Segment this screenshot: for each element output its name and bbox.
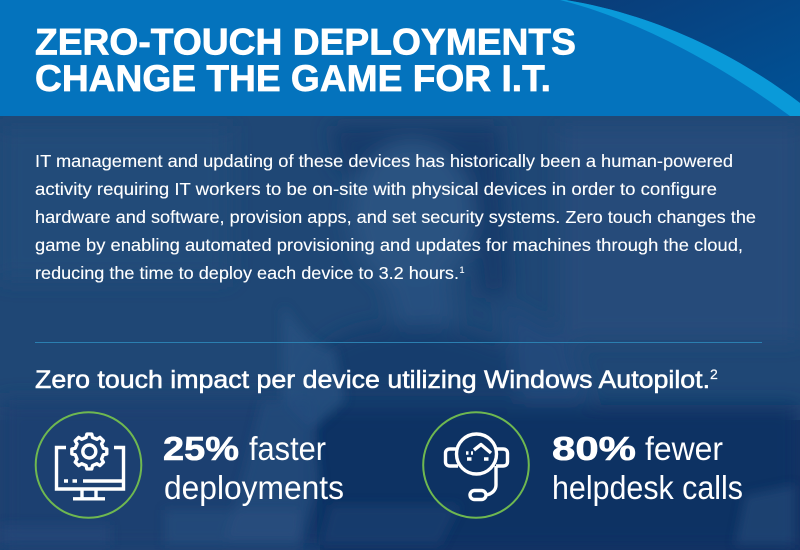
intro paragraph: hardware and software, provision apps, and set security systems. Zero touch changes the bbox=[35, 207, 756, 227]
intro paragraph bbox=[35, 151, 756, 283]
label: 25% bbox=[163, 430, 239, 467]
divider bbox=[35, 342, 762, 343]
title bbox=[35, 22, 576, 99]
corner: light blue arc bbox=[560, 0, 800, 116]
intro paragraph: game by enabling automated provisioning and updates for machines through the cloud, bbox=[35, 235, 743, 255]
icon: headset agent bbox=[423, 412, 529, 518]
stat: 80% fewer helpdesk calls: fewer bbox=[645, 430, 723, 467]
header band with curved corner bbox=[0, 0, 800, 116]
title: CHANGE THE GAME FOR I.T. bbox=[35, 58, 551, 99]
intro paragraph: 1 bbox=[460, 265, 465, 275]
stat: 25% faster deployments: faster bbox=[249, 430, 326, 467]
subheading: Zero touch impact per device utilizing Windows Autopilot. bbox=[35, 366, 710, 394]
stat: 25% faster deployments bbox=[36, 412, 344, 518]
intro paragraph: activity requiring IT workers to be on-site with physical devices in order to configure bbox=[35, 179, 717, 199]
stat: 80% fewer helpdesk calls: helpdesk calls bbox=[552, 469, 743, 506]
subheading: 2 bbox=[710, 366, 718, 382]
stat: 25% faster deployments: deployments bbox=[164, 469, 344, 506]
icon: monitor with gear bbox=[36, 412, 141, 518]
intro paragraph: IT management and updating of these devices has historically been a human-powered bbox=[35, 151, 733, 171]
stat: 80% fewer helpdesk calls bbox=[423, 412, 743, 518]
intro paragraph: reducing the time to deploy each device to 3.2 hours. bbox=[35, 263, 459, 283]
title: ZERO-TOUCH DEPLOYMENTS bbox=[35, 22, 576, 62]
background: blurred photo of support worker with navy overlay bbox=[0, 116, 800, 550]
label: 80% bbox=[552, 430, 636, 467]
corner: dark blue swoosh bbox=[566, 0, 800, 103]
